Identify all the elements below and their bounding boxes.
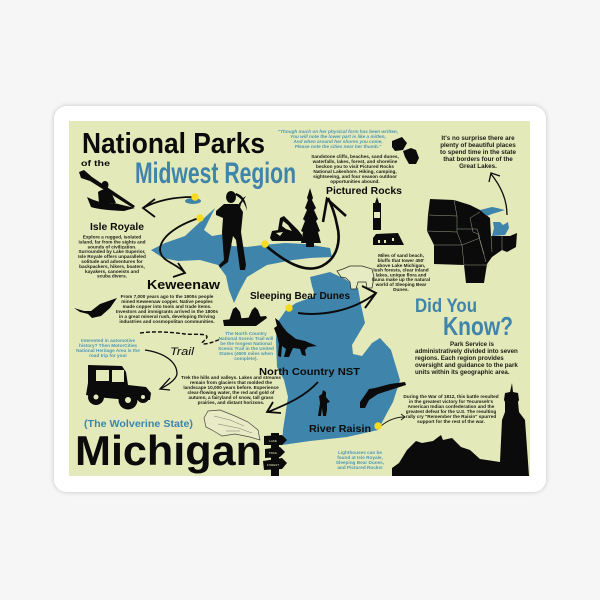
title: Midwest Region: Midwest Region — [135, 157, 296, 190]
text: Isle Royale description: scuba divers. — [97, 274, 127, 279]
text: Sleeping Bear description: lush forests, clear inland — [373, 268, 429, 273]
icon: pine tree — [301, 188, 321, 247]
map: Midwest states — [427, 199, 517, 283]
text: Sleeping Bear description: fauna make up the natural — [372, 277, 430, 282]
text: North Country note: The North Country — [225, 331, 267, 336]
icon: small lighthouse and keeper's house — [373, 197, 404, 245]
text: Pictured Rocks description: National Lakeshore. Hiking, camping, — [313, 169, 397, 174]
text: North Country description: autumn, a fairyland of snow, tall grass — [188, 395, 274, 400]
text: North Country description: landscape 10,000 years before. Experience — [183, 385, 279, 390]
icon: flintlock pistol — [360, 382, 406, 408]
text: Pictured Rocks description: sightseeing, and four season outdoor — [313, 174, 397, 179]
icon: eagle — [74, 298, 117, 318]
text: War of 1812: American Indian confederation and the — [408, 404, 495, 409]
text: Pictured Rocks description: Sandstone cliffs, beaches, sand dunes, — [311, 154, 399, 159]
icon: large lighthouse and house — [392, 383, 529, 476]
text: Sleeping Bear description: above Lake Michigan, — [377, 263, 425, 268]
text: Park Service: administratively divided into seven — [415, 348, 518, 355]
text: MotorCities note: Interested in automotive — [81, 338, 135, 343]
arrow: trail to car — [145, 350, 177, 390]
heading: Isle Royale: Isle Royale — [90, 221, 144, 233]
text: War of 1812: greatest defeat for the U.S. The resulting — [406, 409, 496, 414]
text: Isle Royale description: Explore a rugged, isolated — [83, 234, 141, 240]
text: North Country description: clear-flowing water, the red and gold of — [188, 390, 275, 395]
text: War of 1812: During the War of 1812, this battle resulted — [403, 394, 499, 399]
text: Sleeping Bear description: Miles of sand beach, — [378, 253, 424, 258]
text: Isle Royale description: island, far from the sights and — [79, 239, 146, 244]
icon: signpost: FOREST — [267, 463, 279, 467]
quote: "Though much on her physical form has been written, — [278, 129, 398, 134]
text: Keweenaw description: From 7,000 years ago to the 1900s people — [121, 294, 214, 299]
text: MotorCities note: history? Then MotorCities — [79, 343, 137, 348]
text: surprise note: Great Lakes. — [459, 163, 497, 170]
text: Keweenaw description: industries and cosmopolitan communities. — [119, 319, 215, 324]
text: Keweenaw description: in a great mineral rush, developing thriving — [119, 314, 215, 319]
icon: signpost: LAKE — [269, 439, 277, 443]
arrow: to North Country text — [267, 382, 318, 413]
quote: You will note the lower part is like a mitten, — [290, 134, 386, 139]
sticker backing — [54, 106, 546, 492]
text: surprise note: to spend time in the state — [440, 149, 516, 156]
arrow: to Keweenaw — [160, 218, 199, 277]
title: National Parks: National Parks — [82, 128, 265, 160]
heading: Did You Know: Know? — [443, 311, 513, 341]
arrow: note to midwest map — [489, 173, 507, 215]
heading: Did You Know: Did You — [415, 296, 477, 317]
text: MotorCities note: road trip for you! — [89, 353, 127, 358]
text: lighthouses note: Lighthouses can be — [338, 450, 382, 455]
map: Isle Royale — [185, 198, 201, 204]
text: Isle Royale description: backpackers, hikers, boaters, — [79, 264, 145, 269]
arrow: to Sleeping Bear Dunes text — [298, 286, 376, 314]
text: lighthouses note: Sleeping Bear Dunes, — [336, 460, 384, 465]
text: Keweenaw description: Investors and immigrants arrived in the 1800s — [116, 309, 218, 314]
title: Michigan: Michigan — [75, 427, 262, 474]
icon: wolf — [274, 318, 317, 357]
icon: signpost — [263, 433, 287, 476]
text: surprise note: plenty of beautiful places — [440, 142, 516, 149]
heading: North Country NST: North Country NST — [259, 366, 361, 378]
location markers — [191, 193, 382, 430]
label: Trail: Trail — [170, 346, 195, 358]
text: Isle Royale description: Surrounded by Lake Superior, — [79, 249, 145, 254]
arrow: to River Raisin text — [381, 414, 405, 426]
text: Pictured Rocks description: opportunities abound. — [330, 179, 380, 184]
text: North Country note: be the longest National — [220, 341, 272, 346]
text: North Country note: National Scenic Trail will — [219, 336, 273, 341]
heading: Did You Know — [415, 296, 513, 341]
icon: miner with pickaxe — [216, 191, 247, 270]
icon: hiker — [318, 390, 330, 416]
text: Pictured Rocks description: beckon you to visit Pictured Rocks — [316, 164, 394, 169]
text: North Country note: States (4600 miles when — [219, 351, 273, 356]
text: Isle Royale description: solitude and adventures for — [81, 259, 143, 264]
icon: bear outline — [337, 266, 374, 289]
text: War of 1812: support for the rest of the war. — [417, 419, 485, 424]
text: Sleeping Bear description: lakes, unique flora and — [376, 272, 427, 277]
heading: Pictured Rocks: Pictured Rocks — [326, 185, 402, 197]
text: Sleeping Bear description: bluffs that tower 450' — [378, 258, 424, 263]
dashed trail line — [140, 332, 221, 344]
title: of the: of the — [81, 158, 110, 168]
text: Park Service: Park Service is — [450, 341, 495, 348]
heading: Sleeping Bear Dunes: Sleeping Bear Dunes — [250, 291, 350, 302]
text: War of 1812: rally cry "Remember the Raisin" spurred — [406, 414, 496, 419]
text: Park Service: regions. Each region provides — [415, 355, 504, 362]
map: Michigan — [151, 198, 400, 445]
icon: rocks and cliff — [270, 216, 302, 241]
text: Keweenaw description: mined Keweenaw copper. Native peoples — [121, 299, 213, 304]
text: North Country note: Scenic Trail in the United — [218, 346, 274, 351]
text: lighthouses note: found at Isle Royale, — [337, 455, 383, 460]
text: Keweenaw description: made copper into tools and trade items. — [123, 304, 211, 309]
text: lighthouses note: and Pictured Rocks! — [337, 465, 383, 470]
text: Park Service: oversight and guidance to the park — [415, 362, 518, 369]
text: Sleeping Bear description: world of Sleeping Bear — [375, 282, 427, 287]
heading: River Raisin: River Raisin — [309, 423, 371, 435]
text: North Country description: Trek the hills and valleys. Lakes and streams — [181, 375, 281, 380]
quote: Please note the cities near her thumb." — [295, 144, 382, 149]
icon: Michigan mitten silhouette — [392, 137, 419, 164]
text: Pictured Rocks description: waterfalls, lakes, forest, and shoreline — [312, 159, 398, 164]
text: Sleeping Bear description: Dunes. — [393, 287, 409, 292]
text: North Country description: remain from glaciers that molded the — [190, 380, 273, 385]
text: surprise note: It's no surprise there are — [441, 135, 515, 142]
text: North Country description: prairies, and distant horizons. — [198, 400, 264, 405]
heading: Keweenaw: Keweenaw — [147, 277, 221, 292]
text: MotorCities note: National Heritage Area is the — [76, 348, 140, 353]
icon: canoe with paddlers — [223, 307, 267, 326]
icon: vintage car — [86, 365, 151, 410]
text: War of 1812: in the greatest victory for Tecumseh's — [409, 399, 493, 404]
icon: kayaker — [79, 170, 135, 211]
map: Michigan within Midwest — [480, 207, 509, 236]
title — [81, 128, 296, 190]
arrow: to Isle Royale — [143, 197, 193, 217]
icon: wolverine outline — [204, 410, 260, 440]
map: Lower Peninsula — [276, 272, 400, 445]
arrow: to Pictured Rocks — [265, 198, 346, 269]
quote: And when around her shores you come, — [292, 139, 383, 144]
text: surprise note — [440, 135, 516, 170]
label: The Wolverine State: (The Wolverine State) — [84, 418, 193, 430]
text: North Country note: complete). — [234, 356, 258, 361]
text: Park Service: units within its geographic area. — [415, 369, 510, 376]
text: Park Service — [415, 341, 518, 376]
panel: infographic background — [69, 121, 530, 476]
quote — [278, 129, 398, 149]
map: Upper Peninsula — [151, 208, 332, 303]
text: Isle Royale description: sounds of civilization. — [88, 244, 136, 249]
icon: signpost: TRAIL — [269, 451, 278, 455]
text: surprise note: that borders four of the — [443, 156, 513, 163]
text: Isle Royale description: kayakers, canoeists and — [85, 269, 139, 274]
text: Isle Royale description: Isle Royale offers unparalleled — [78, 254, 146, 259]
